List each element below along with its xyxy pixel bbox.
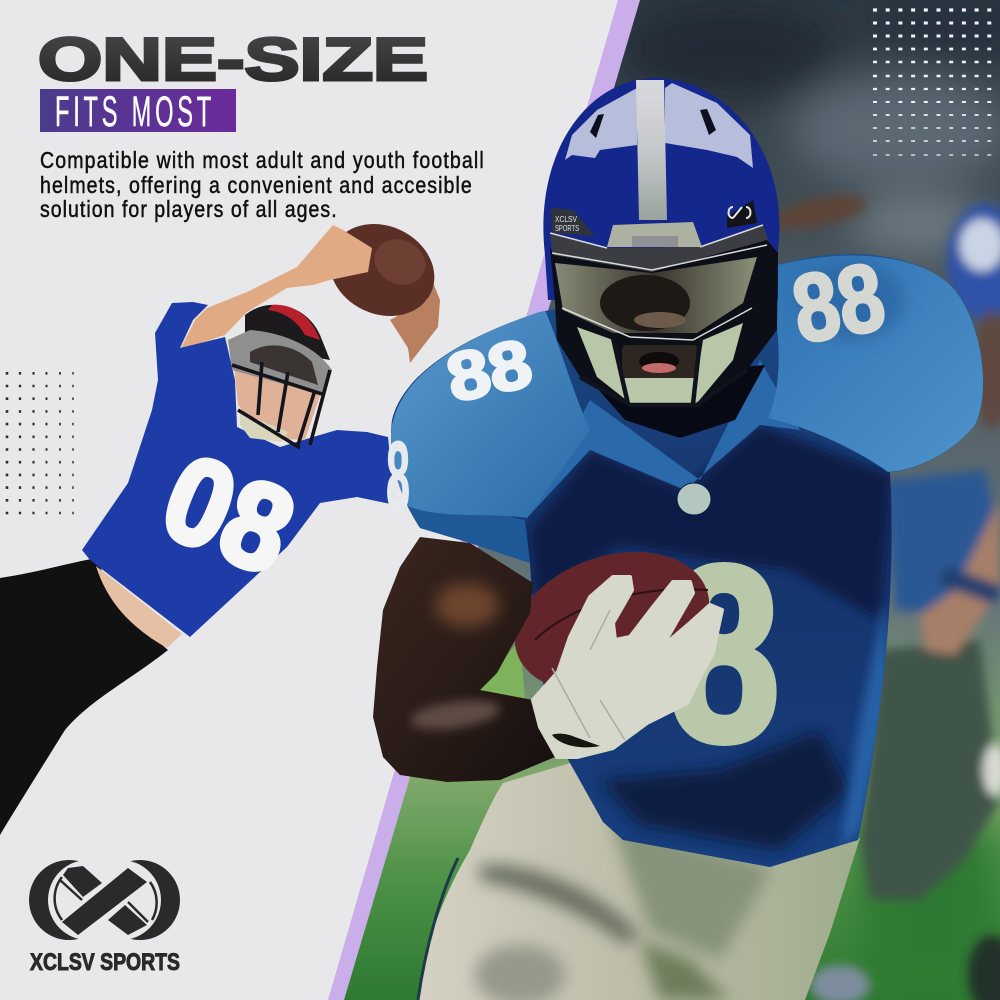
helmet red stripe: [268, 305, 320, 340]
child helmet: [228, 305, 332, 448]
helmet: [543, 78, 779, 405]
description: solution for players of all ages.: [40, 197, 337, 222]
nose: [634, 312, 686, 328]
purple diagonal stripe: [328, 0, 640, 1000]
blurred background players: [770, 188, 1000, 1000]
chest number: 8: [668, 514, 780, 793]
dark chest mesh: [530, 425, 892, 620]
stadium photo background: [300, 0, 1000, 1000]
mouth area: [622, 345, 698, 378]
chest badge: [677, 483, 711, 515]
left helmet sticker: [551, 208, 595, 236]
visor rims: [550, 225, 767, 340]
subtitle bar: [40, 89, 236, 136]
neck: [590, 365, 765, 438]
subtitle text: FITS MOST: [55, 89, 211, 136]
description: Compatible with most adult and youth football: [40, 148, 484, 173]
visor shadow: [250, 345, 318, 385]
right sticker logo: [728, 207, 750, 218]
child visor: [228, 330, 332, 395]
description: [40, 148, 484, 222]
right shoulder pad: [765, 256, 983, 472]
forearm highlight: [409, 696, 501, 734]
helmet dome: [245, 305, 330, 360]
visor lens: [555, 257, 757, 333]
main football player: [373, 78, 983, 1000]
clip label plate: [632, 236, 678, 247]
head base: [232, 345, 328, 440]
left shoulder pad: [391, 310, 590, 518]
visor side frame: [550, 240, 778, 403]
child chin guard: [240, 412, 288, 442]
face: [600, 275, 690, 331]
visor clip: [607, 222, 702, 247]
football: [496, 528, 728, 716]
right helmet sticker: [727, 200, 757, 228]
dot grid: left: [7, 372, 73, 515]
forearm: [373, 537, 555, 782]
shirt fold shadow: [600, 730, 850, 850]
legs and pants: [400, 760, 880, 1000]
child player: [0, 207, 450, 835]
face mask: [580, 338, 747, 405]
helmet right dome reflection: [665, 83, 753, 168]
shoulder shadow: [795, 260, 905, 340]
tongue: [642, 363, 676, 373]
title: ONE-SIZE: [38, 26, 428, 93]
right shoulder number: 88: [785, 243, 892, 364]
child raised arm and hand: [180, 225, 372, 350]
right side highlight: [840, 600, 890, 850]
helmet vents: [590, 109, 716, 138]
child jersey: [82, 302, 395, 637]
helmet left dome reflection: [565, 88, 637, 160]
bright field patch behind elbow: [480, 645, 525, 698]
child legs: [0, 558, 168, 835]
child jersey number: 08: [146, 428, 311, 601]
bicep highlight: [435, 583, 499, 627]
child midriff: [96, 566, 182, 648]
left sticker text: XCLSV: [555, 215, 578, 224]
jersey body: [391, 254, 983, 867]
left hip edge: [418, 858, 458, 1000]
jersey shading: [391, 256, 983, 850]
child face mask: [232, 362, 330, 448]
main football player: 8: [386, 421, 410, 533]
infinity mark: [29, 860, 180, 940]
left shoulder number: 88: [440, 325, 538, 417]
logo: [29, 860, 180, 976]
glove: [533, 577, 722, 757]
helmet shell: [543, 78, 779, 300]
left sticker text line two: SPORTS: [555, 224, 579, 233]
left sleeve: [407, 505, 530, 563]
football held by child: [314, 207, 450, 333]
dot grid: top right: [873, 10, 992, 155]
helmet stripe: [636, 80, 667, 220]
upper chest: [525, 360, 800, 520]
child other arm: [390, 275, 440, 363]
mouth: [639, 352, 679, 370]
chin guard: [577, 323, 743, 403]
description: helmets, offering a convenient and accesible: [40, 173, 472, 198]
logo wordmark: XCLSV SPORTS: [30, 949, 180, 976]
visor band: [550, 225, 770, 275]
